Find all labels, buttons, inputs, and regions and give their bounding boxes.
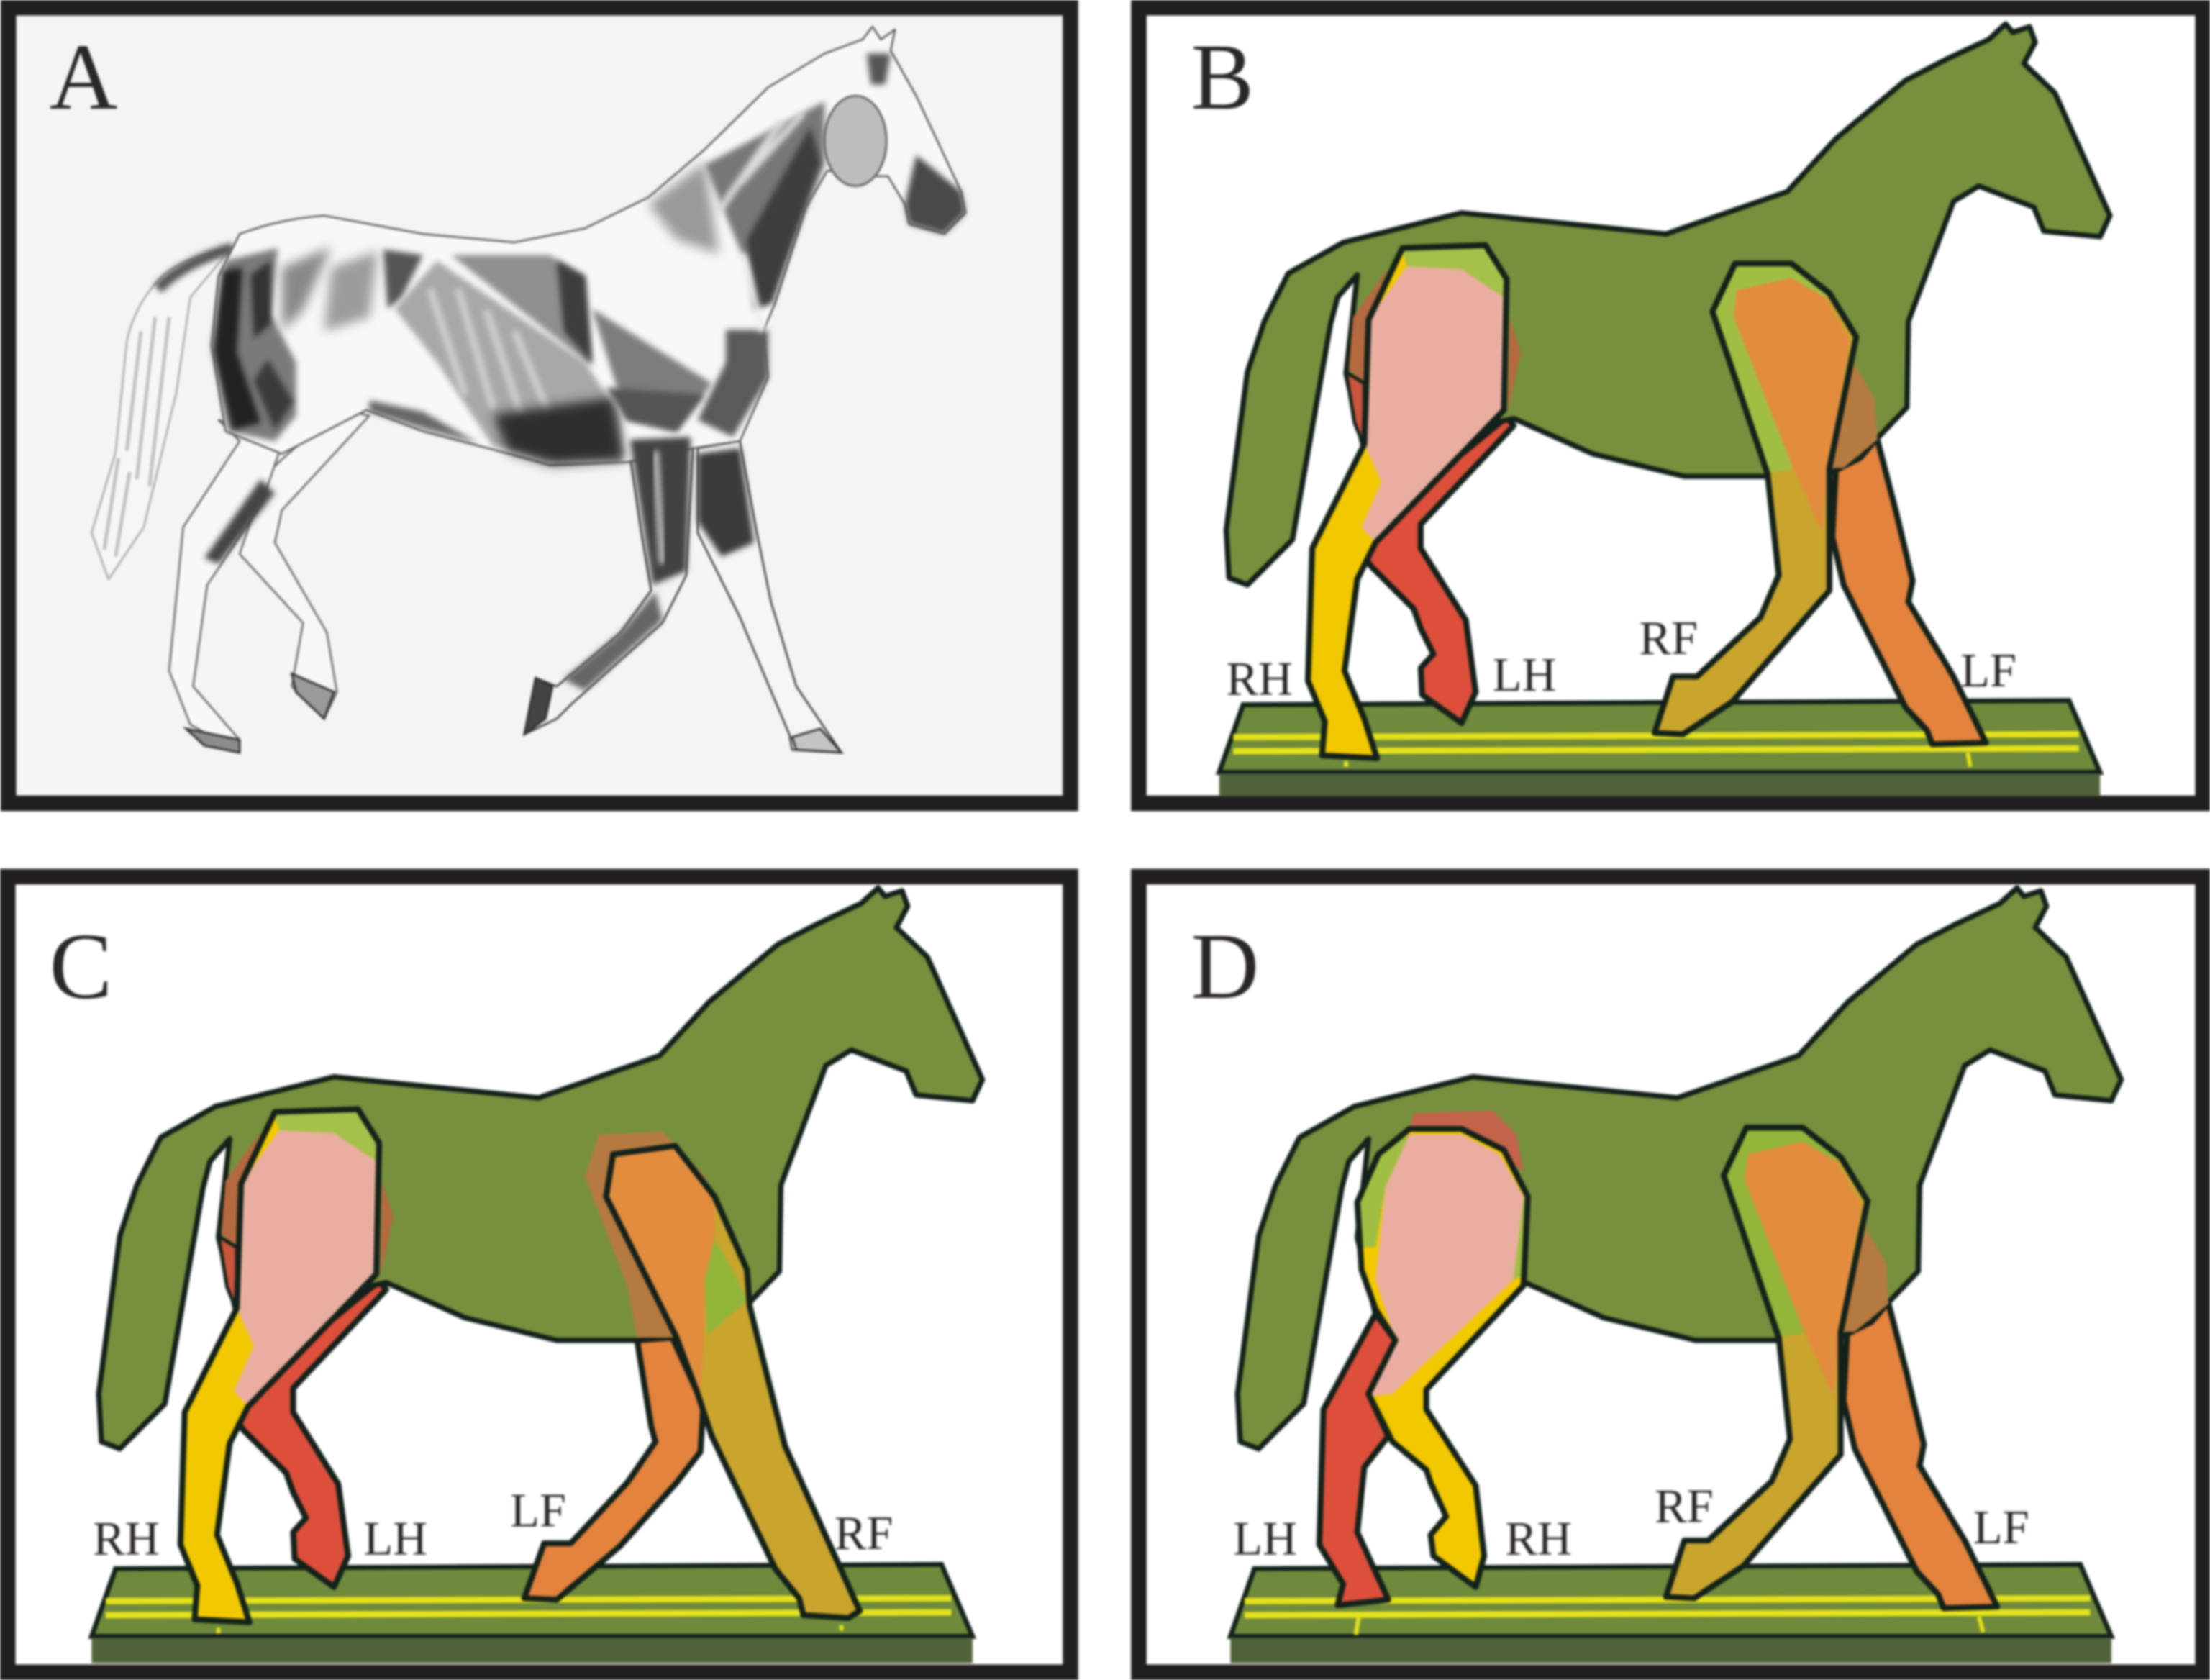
letter A: A — [50, 25, 117, 130]
leg labels: LF — [1973, 1502, 2029, 1554]
leg labels: LH — [363, 1513, 427, 1566]
right foreleg with shoulder — [606, 1146, 860, 1618]
horse body and neck — [212, 27, 965, 465]
leg labels: RH — [93, 1513, 160, 1566]
leg labels — [1226, 612, 2016, 706]
leg labels — [1233, 1481, 2029, 1566]
ground platform — [91, 1564, 973, 1663]
leg labels: RF — [835, 1507, 893, 1560]
panel D: walk phase diagram — [1139, 876, 2203, 1672]
ground platform — [1230, 1564, 2111, 1663]
letter C: C — [50, 914, 112, 1019]
near foreleg — [524, 437, 694, 735]
right foreleg with shoulder — [1655, 263, 1856, 735]
left foreleg, orange — [1844, 1304, 1997, 1608]
muscle activity shading — [1409, 1111, 1888, 1332]
ground platform — [1219, 701, 2100, 796]
far foreleg — [698, 441, 842, 753]
leg labels: LH — [1233, 1513, 1297, 1566]
panel B: walk phase diagram — [1139, 8, 2203, 804]
hooves — [186, 678, 842, 753]
left hind leg, red — [1319, 1314, 1396, 1605]
leg labels: RF — [1640, 612, 1698, 665]
panel A: pencil drawing of horse musculature — [9, 8, 1070, 804]
right hind leg with thigh — [1358, 1129, 1528, 1587]
leg labels: LH — [1493, 649, 1557, 701]
muscle activity shading — [219, 1132, 719, 1338]
letter D: D — [1191, 914, 1259, 1019]
right foreleg with shoulder — [1666, 1127, 1868, 1598]
right hind leg with thigh — [181, 1109, 379, 1622]
left foreleg, orange — [524, 1338, 704, 1599]
leg labels: LF — [510, 1484, 566, 1537]
leg labels: RH — [1226, 653, 1293, 706]
left hind leg, red — [1353, 417, 1514, 723]
horse body silhouette — [1237, 888, 2122, 1449]
letter B: B — [1191, 25, 1254, 130]
panel C: walk phase diagram — [8, 876, 1070, 1672]
left hind leg, red — [225, 1281, 386, 1587]
leg labels — [93, 1484, 893, 1566]
horse body silhouette — [99, 888, 983, 1449]
leg labels: RH — [1505, 1513, 1572, 1566]
far hind leg — [240, 409, 369, 719]
horse tail — [91, 245, 240, 579]
leg labels: RF — [1655, 1481, 1714, 1533]
shaded muscles — [204, 53, 965, 691]
horse body silhouette — [1226, 24, 2110, 585]
far hoof — [292, 673, 334, 719]
left foreleg, orange — [1832, 440, 1986, 744]
muscle activity shading — [1346, 268, 1878, 468]
near hind leg — [169, 420, 282, 753]
right hind leg with thigh — [1308, 245, 1506, 758]
leg labels: LF — [1960, 645, 2016, 697]
